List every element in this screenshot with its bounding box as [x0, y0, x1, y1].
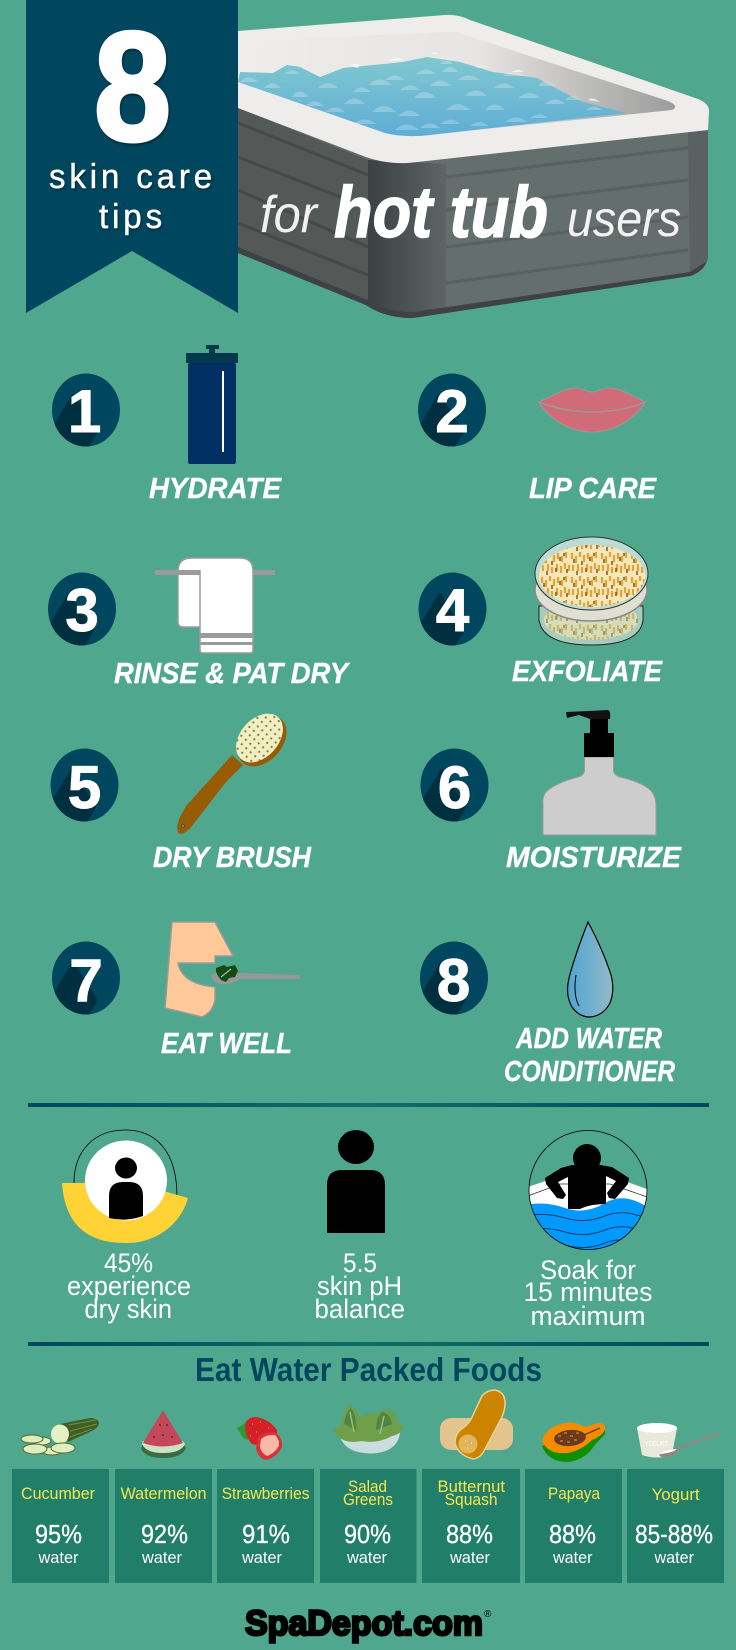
stat text: balance [314, 1294, 405, 1324]
card label [343, 1477, 393, 1509]
stat: skin pH [314, 1130, 405, 1324]
tip 4: exfoliate [418, 537, 664, 688]
icon: yogurt cup and spoon [637, 1423, 720, 1458]
card label [438, 1477, 505, 1509]
food: butternut squash [422, 1390, 520, 1583]
tip 7: eat well: 7 [69, 947, 103, 1014]
food: papaya: 88% [549, 1519, 596, 1549]
tip 6: moisturize: 6 [438, 754, 471, 821]
stat text: dry skin [84, 1294, 172, 1324]
stat text [524, 1255, 652, 1331]
food: strawberries: 91% [242, 1519, 290, 1549]
icon: towel on rail [155, 558, 275, 653]
food: papaya [525, 1422, 622, 1583]
icon: yogurt cup and spoon: YOGURT [645, 1441, 669, 1448]
food: cucumber [12, 1418, 109, 1583]
stat text: 45% [104, 1248, 153, 1278]
ribbon text: tips [99, 198, 166, 236]
logo: SpaDepot.com [245, 1604, 483, 1643]
icon: watermelon slice [141, 1410, 186, 1458]
icon: butternut squash [440, 1390, 513, 1459]
big number 8: 8 [94, 0, 171, 173]
icon: scrub jar [535, 537, 648, 645]
tip 7: eat well [52, 922, 300, 1060]
tip 3: rinse and pat dry [48, 558, 350, 690]
tip 2: lip care: LIP CARE [529, 473, 658, 505]
icon: long-handled brush [177, 704, 296, 834]
tip label: CONDITIONER [504, 1056, 675, 1088]
stat text [314, 1248, 405, 1324]
stat text: Soak for [540, 1255, 636, 1285]
tip 8: add water conditioner: 8 [437, 947, 470, 1014]
card label: Greens [343, 1490, 393, 1509]
food: papaya: Papaya [548, 1484, 600, 1503]
icon: papaya [542, 1422, 605, 1462]
food: butternut squash: water [449, 1548, 490, 1567]
food: papaya: water [552, 1548, 593, 1567]
logo: ® [484, 1609, 492, 1620]
tip label [504, 1023, 675, 1088]
tub caption: for [260, 186, 320, 244]
card label: Squash [445, 1490, 498, 1509]
food: butternut squash: 88% [446, 1519, 493, 1549]
stat text: maximum [530, 1301, 646, 1331]
stat text: 5.5 [343, 1248, 377, 1278]
icon: lips [538, 388, 646, 432]
stat text [67, 1248, 191, 1324]
tub caption [260, 173, 681, 253]
icon: pump bottle [543, 710, 656, 835]
tip 4: exfoliate: 4 [436, 577, 470, 644]
stat: 45% dry skin [62, 1130, 191, 1324]
food: watermelon: 92% [141, 1519, 188, 1549]
tip 7: eat well: EAT WELL [161, 1028, 292, 1060]
food: watermelon [115, 1410, 212, 1583]
icon: face eating greens [165, 922, 300, 1017]
food: watermelon: Watermelon [121, 1484, 207, 1503]
icon: cucumber [21, 1418, 99, 1455]
tip label: ADD WATER [515, 1023, 662, 1055]
food: salad greens: water [346, 1548, 387, 1567]
food: watermelon: water [141, 1548, 182, 1567]
card label: Butternut [438, 1477, 505, 1496]
food: yogurt [627, 1423, 724, 1583]
food: yogurt: water [654, 1548, 694, 1567]
food: yogurt: 85-88% [635, 1519, 713, 1549]
tub caption: users [567, 191, 681, 247]
tip 6: moisturize: MOISTURIZE [506, 842, 683, 874]
tip 5: dry brush [50, 704, 312, 874]
tip 2: lip care [418, 374, 658, 505]
food: strawberries: Strawberries [222, 1484, 310, 1503]
food: cucumber: 95% [35, 1519, 82, 1549]
icon: salad bowl [333, 1405, 404, 1454]
stat: soak time [524, 1130, 652, 1331]
tip 1: hydrate: 1 [68, 378, 101, 445]
ribbon banner [26, 0, 238, 313]
tip 6: moisturize [420, 710, 683, 874]
tip 4: exfoliate: EXFOLIATE [512, 656, 664, 688]
card label: Salad [348, 1477, 387, 1496]
stat text: 15 minutes [524, 1277, 652, 1307]
food: strawberries [217, 1417, 314, 1583]
stat text: skin pH [317, 1271, 402, 1301]
food: strawberries: water [241, 1548, 282, 1567]
tip 3: rinse and pat dry: RINSE & PAT DRY [114, 658, 350, 690]
tip 3: rinse and pat dry: 3 [65, 577, 99, 644]
icon: water bottle [186, 345, 238, 464]
stat text: experience [67, 1271, 191, 1301]
hot tub illustration [238, 15, 709, 318]
icon: water drop [568, 922, 613, 1017]
food: yogurt: Yogurt [652, 1485, 700, 1504]
food: salad greens [320, 1405, 416, 1583]
food: cucumber: Cucumber [21, 1484, 95, 1503]
food: cucumber: water [38, 1548, 79, 1567]
tip 5: dry brush: 5 [68, 754, 101, 821]
tub caption: hot tub [334, 173, 548, 253]
tip 5: dry brush: DRY BRUSH [153, 842, 312, 874]
tip 1: hydrate: HYDRATE [149, 473, 283, 505]
ribbon text [49, 158, 216, 236]
heading: foods: Eat Water Packed Foods [195, 1351, 542, 1388]
tip 8: add water conditioner [420, 922, 675, 1088]
tip 1: hydrate [52, 345, 283, 505]
icon: strawberry [237, 1417, 282, 1460]
tip 2: lip care: 2 [435, 378, 469, 445]
food: salad greens: 90% [344, 1519, 391, 1549]
ribbon text: skin care [49, 158, 216, 196]
